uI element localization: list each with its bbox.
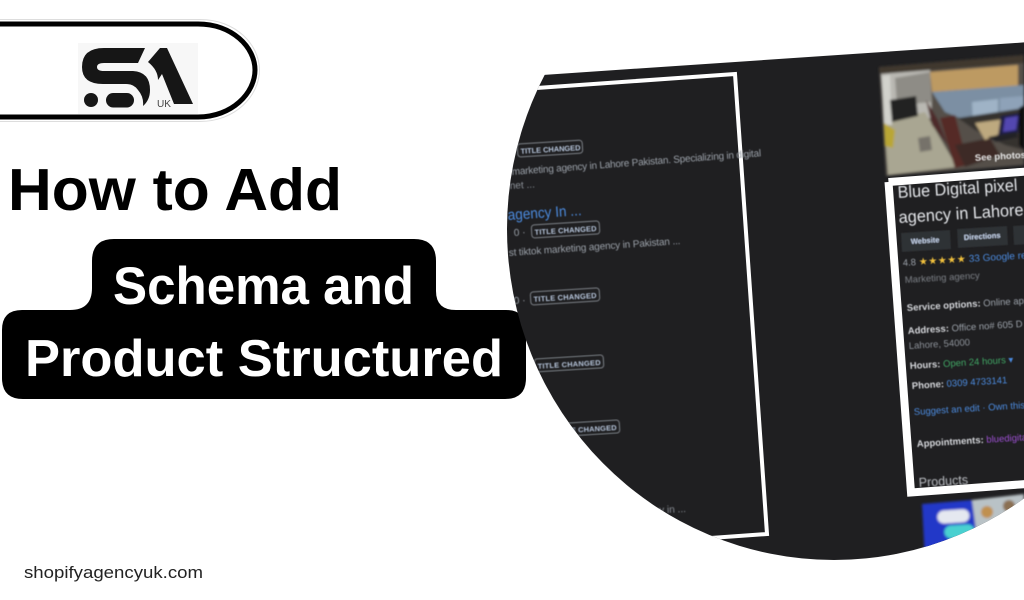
- heading badge: Schema and Product Structured: [2, 239, 526, 399]
- business name: [897, 176, 1024, 227]
- business details list: Phone: 0309 4733141: [912, 375, 1008, 392]
- business name: Blue Digital pixel: [897, 176, 1018, 202]
- rating row: [902, 252, 1024, 266]
- website address: shopifyagencyuk.com: [24, 564, 203, 582]
- logo pill outline: [0, 20, 260, 122]
- logo: SA UK: UK: [157, 98, 171, 110]
- result 5 badge: [568, 419, 621, 436]
- result 2 title, badge and snippet: 0 ·: [514, 227, 526, 239]
- business details list: Hours: Open 24 hours ▾: [910, 355, 1014, 372]
- circular screenshot panel: [507, 42, 1024, 560]
- heading: How to Add: How to Add: [8, 157, 342, 223]
- products heading: Products: [918, 473, 968, 490]
- result 3 badge: 0 ·: [514, 295, 526, 307]
- business details list: Address: Office no# 605 D: [908, 319, 1023, 337]
- heading badge: Schema and Product Structured: Product Structured: [25, 330, 503, 388]
- product thumbnails: [920, 492, 1024, 548]
- heading badge: Schema and Product Structured: Schema and: [113, 257, 414, 316]
- business details list: [907, 293, 1024, 450]
- rating row: 4.8: [903, 257, 916, 269]
- result 1 badge and snippet: marketing agency in Lahore Pakistan. Specializing in digital: [511, 148, 762, 178]
- action buttons: Directions: [964, 231, 1001, 242]
- result 1 badge and snippet: TITLE CHANGED: [520, 143, 581, 156]
- result 2 title, badge and snippet: [508, 206, 680, 256]
- result 2 title, badge and snippet: agency In ...: [507, 202, 582, 224]
- result 4 badge: TITLE CHANGED: [537, 358, 601, 371]
- action buttons: [901, 225, 1024, 252]
- photo: office interior: [879, 55, 1024, 176]
- business details list: Lahore, 54000: [909, 337, 970, 352]
- result 3 badge: TITLE CHANGED: [533, 291, 597, 304]
- panel: business details frame: [888, 170, 1024, 492]
- result 1 badge and snippet: net ...: [510, 179, 535, 192]
- result 2 title, badge and snippet: st tiktok marketing agency in Pakistan ...: [508, 236, 681, 259]
- result 4 badge: [534, 355, 604, 372]
- result 3 badge: [514, 288, 600, 307]
- rating row: ★★★★★: [919, 254, 966, 268]
- result 1 badge and snippet: [510, 140, 762, 192]
- logo: SA UK: [78, 43, 198, 114]
- result 2 title, badge and snippet: TITLE CHANGED: [534, 224, 597, 237]
- action buttons: Website: [911, 235, 940, 246]
- business category: Marketing agency: [905, 270, 980, 286]
- panel: search results frame: [480, 74, 767, 543]
- result 5 badge: TITLE CHANGED: [554, 423, 617, 436]
- result 6 snippet: agency in ...: [632, 504, 686, 518]
